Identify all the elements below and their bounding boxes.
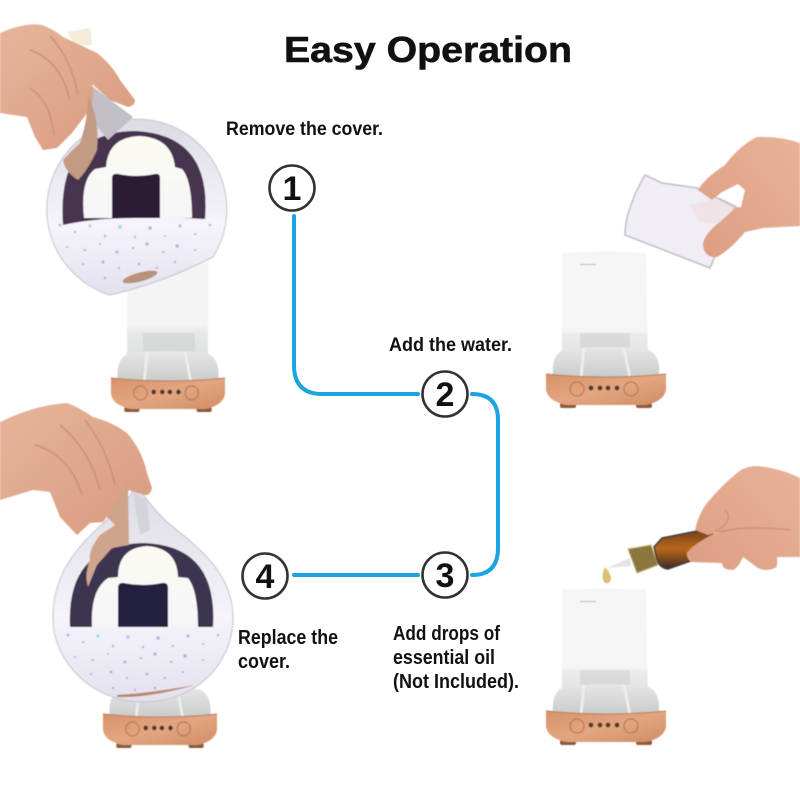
step badge 4 xyxy=(242,554,288,598)
text: replace the cover: Replace the xyxy=(238,627,338,649)
thumb xyxy=(63,95,98,180)
hand gripping xyxy=(0,403,152,535)
illustration: removing the cover xyxy=(0,24,227,412)
text: add drops of essential oil: (Not Included). xyxy=(393,671,519,693)
connector: step 2 to step 3 xyxy=(472,394,498,575)
diffuser with water tank xyxy=(546,252,666,408)
step badge 4: 4 xyxy=(256,558,275,596)
title: Easy Operation xyxy=(284,29,572,70)
thumb xyxy=(86,482,129,587)
text: add drops of essential oil: Add drops of xyxy=(393,623,500,645)
hand back fingers behind glass xyxy=(690,198,738,225)
hand holding bottle xyxy=(687,466,800,570)
diffuser glass column xyxy=(127,262,208,358)
illustration: adding water xyxy=(546,137,800,408)
top knob xyxy=(88,83,133,140)
diffuser with water tank xyxy=(546,588,666,745)
text: replace the cover xyxy=(238,627,338,673)
step badge 1 xyxy=(270,166,314,210)
illustration: adding oil xyxy=(546,466,800,745)
oil drop xyxy=(602,567,611,583)
step badge 2 xyxy=(422,372,468,416)
step badge 3: 3 xyxy=(436,557,454,595)
hand holding glass xyxy=(698,137,800,257)
amber bottle xyxy=(654,528,716,569)
globe cover xyxy=(47,119,227,295)
teardrop globe cover xyxy=(53,490,233,702)
step badge 1: 1 xyxy=(283,170,301,208)
water glass xyxy=(625,175,735,268)
text: add drops of essential oil: essential oil xyxy=(393,647,495,669)
bottle cap xyxy=(628,545,658,573)
text: replace the cover: cover. xyxy=(238,651,290,673)
hand gripping xyxy=(0,24,135,150)
text: add the water: Add the water. xyxy=(389,335,512,356)
diffuser base xyxy=(103,687,217,748)
step badge 3 xyxy=(422,552,468,598)
connector: step 3 to step 4 xyxy=(294,573,418,577)
connector: step 1 to step 2 xyxy=(294,216,418,394)
dropper tip xyxy=(607,558,631,568)
diffuser base xyxy=(111,351,225,412)
step badge 2: 2 xyxy=(436,376,454,414)
text: add drops of essential oil xyxy=(393,623,519,693)
illustration: replacing the cover xyxy=(0,403,233,748)
text: remove the cover: Remove the cover. xyxy=(226,119,383,140)
top knob xyxy=(113,455,130,493)
